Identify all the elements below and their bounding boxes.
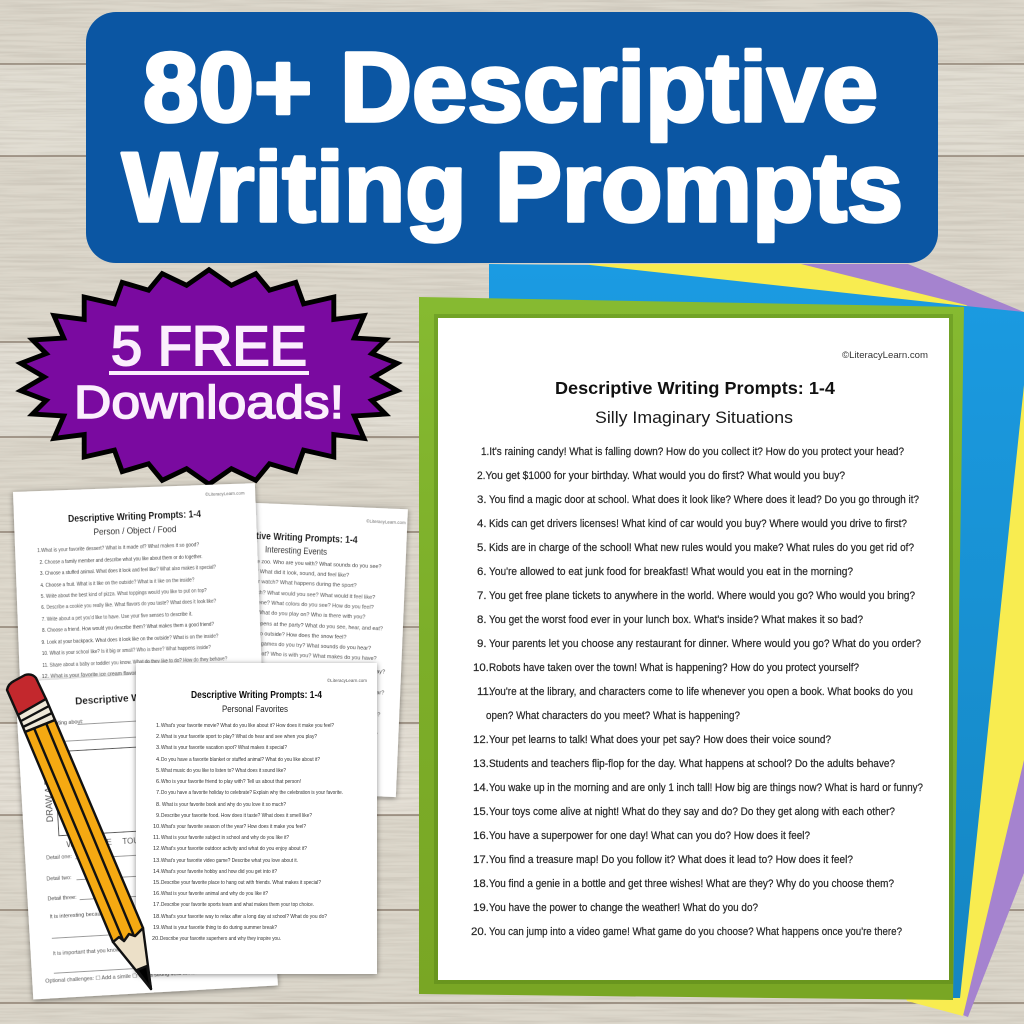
worksheet: graphic organizer: I am writing about: <box>39 719 84 728</box>
worksheet: person object food: Descriptive Writing Prompts: 1-4 <box>68 509 202 525</box>
prompt list: Students and teachers flip-flop for the day. What happens at school? Do the adults behave? <box>489 758 895 770</box>
worksheet: person object food: Person / Object / Food <box>93 524 177 538</box>
worksheet: personal favorites: What is your favorite animal and why do you like it? <box>161 891 268 897</box>
prompt list: You get the worst food ever in your lunch box. What's inside? What makes it so bad? <box>489 614 863 626</box>
worksheet: interesting events: do you do outside? How does the snow feel? <box>239 630 347 641</box>
Downloads: Downloads! <box>74 376 344 428</box>
worksheet: graphic organizer: Detail two: <box>46 875 72 883</box>
worksheet: personal favorites: 5. <box>156 768 161 774</box>
worksheet: personal favorites: 7. <box>156 790 161 796</box>
worksheet: interesting events: Descriptive Writing Prompts: 1-4 <box>224 530 358 546</box>
prompt list: Your toys come alive at night! What do they say and do? Do they get along with each other? <box>489 806 895 818</box>
title: Writing Prompts <box>122 132 903 242</box>
5 FREE: 5 FREE <box>111 314 307 377</box>
worksheet: interesting events: play or watch? What happens during the sport? <box>244 579 357 589</box>
worksheet: personal favorites: Descriptive Writing Prompts: 1-4 <box>191 690 322 701</box>
prompt list: You have the power to change the weather! What do you do? <box>489 902 758 914</box>
worksheet: graphic organizer: DRAW A PICTURE <box>41 745 55 822</box>
worksheet: interesting events: do you eat? Who is with you? What makes do you have? <box>241 650 377 662</box>
worksheet: personal favorites: 13. <box>153 858 161 864</box>
worksheet: interesting events: weather? What did it look, sound, and feel like? <box>235 568 349 579</box>
worksheet: personal favorites: What is your favorite subject in school and why do you like it? <box>161 835 289 841</box>
worksheet: personal favorites: Describe your favorite superhero and why they inspire you. <box>160 936 281 942</box>
prompt list: open? What characters do you meet? What is happening? <box>486 710 740 722</box>
prompt list <box>471 446 923 938</box>
worksheet: interesting events: What happens at the party? What do you see, hear, and eat? <box>237 620 383 632</box>
prompt list: 14. <box>473 782 489 794</box>
worksheet heading: Descriptive Writing Prompts: 1-4 <box>555 378 835 398</box>
worksheet: person object food: 8. Choose a friend. How would you describe them? What makes them a good friend? <box>42 622 214 634</box>
prompt list: 15. <box>473 806 489 818</box>
worksheet: personal favorites: 19. <box>153 925 161 931</box>
worksheet: personal favorites: 10. <box>153 824 161 830</box>
worksheet: interesting events: rides or games do you try? What sounds do you hear? <box>241 640 371 652</box>
worksheet: person object food: 9. Look at your backpack. What does it look like on the outside? What is on the inside? <box>41 634 219 646</box>
worksheet: personal favorites: Describe your favorite sports team and what makes them your top choice. <box>161 902 314 908</box>
blue paper <box>489 264 1024 998</box>
prompt list: 7. <box>477 590 486 602</box>
prompt list: 3. <box>477 494 486 506</box>
prompt list: You have a superpower for one day! What can you do? How does it feel? <box>489 830 810 842</box>
prompt list: 18. <box>473 878 489 890</box>
prompt list: 20. <box>471 926 487 938</box>
prompt list: 6. <box>477 566 486 578</box>
worksheet: personal favorites: 11. <box>153 835 161 841</box>
green paper <box>419 297 964 1000</box>
worksheet subheading: Silly Imaginary Situations <box>595 409 793 427</box>
prompt list: 10. <box>473 662 489 674</box>
worksheet: personal favorites: What music do you like to listen to? What does it sound like? <box>161 768 286 774</box>
prompt list: Your parents let you choose any restaurant for dinner. Where would you go? What do you order? <box>489 638 921 650</box>
worksheet: graphic organizer: Descriptive Writing Prompts <box>75 689 209 708</box>
worksheet: person object food: 10. What is your school like? Is it big or small? Who is there? What happens inside? <box>42 645 211 657</box>
prompt list: You wake up in the morning and are only 1 inch tall! How big are things now? What is hard or funny? <box>489 782 923 794</box>
prompt list: 1.It's raining candy! What is falling down? How do you collect it? How do you protect your head? <box>481 446 904 458</box>
prompt list: You find a genie in a bottle and get three wishes! What are they? Why do you choose them? <box>489 878 894 890</box>
worksheet: personal favorites: 18. <box>153 914 161 920</box>
prompt list: Kids can get drivers licenses! What kind of car would you buy? Where would you drive to first? <box>489 518 907 530</box>
worksheet: person object food: 4. Choose a fruit. What is it like on the outside? What is it like on the inside? <box>40 577 194 589</box>
copyright: ©LiteracyLearn.com <box>842 350 928 361</box>
worksheet: personal favorites: What's your favorite outdoor activity and what do you enjoy about it? <box>161 846 307 852</box>
worksheet: graphic organizer: TOUCH <box>122 835 151 846</box>
worksheet: personal favorites: Do you have a favorite blanket or stuffed animal? What do you like about it? <box>161 757 320 763</box>
worksheet: person object food: 11. Share about a baby or toddler you know. What do they like to do? How do they behave? <box>42 656 227 669</box>
prompt list: Your pet learns to talk! What does your pet say? How does their voice sound? <box>489 734 831 746</box>
worksheet: personal favorites: What is your favorite thing to do during summer break? <box>161 925 277 931</box>
worksheet: person object food: 5. Write about the best kind of pizza. What toppings would you like to put on top? <box>41 588 207 600</box>
worksheet: personal favorites: Describe your favorite food. How does it taste? What does it smell like? <box>161 813 312 819</box>
title <box>122 32 903 242</box>
prompt list: 11. <box>477 686 492 698</box>
worksheet: graphic organizer: WHAT I SEE <box>66 838 112 849</box>
prompt list: Robots have taken over the town! What is happening? How do you protect yourself? <box>489 662 859 674</box>
prompt list: You find a treasure map! Do you follow it? What does it lead to? How does it feel? <box>489 854 853 866</box>
worksheet: personal favorites: What's your favorite movie? What do you like about it? How does it make you feel? <box>161 723 334 729</box>
worksheet: graphic organizer: Detail one: <box>46 854 72 861</box>
worksheet: person object food: 1.What is your favorite dessert? What is it made of? What makes it so good? <box>37 542 199 554</box>
worksheet: personal favorites: What's your favorite hobby and how did you get into it? <box>161 869 277 875</box>
worksheet: interesting events: playground. What do you play on? Who is there with you? <box>227 609 365 621</box>
worksheet: personal favorites: 8. <box>156 802 161 808</box>
worksheet: personal favorites: What is your favorite book and why do you love it so much? <box>162 802 286 808</box>
worksheet: personal favorites: What's your favorite video game? Describe what you love about it. <box>161 858 298 864</box>
prompt list: 8. <box>477 614 486 626</box>
prompt list: Kids are in charge of the school! What new rules would you make? What rules do you get rid of? <box>489 542 914 554</box>
worksheet: person object food <box>13 483 262 692</box>
worksheet: personal favorites: 17. <box>153 902 161 908</box>
worksheet: personal favorites: 9. <box>156 813 161 819</box>
prompt list: 17. <box>473 854 489 866</box>
worksheet: personal favorites: Personal Favorites <box>222 704 288 715</box>
prompt list: You get free plane tickets to anywhere in the world. Where would you go? Who would you bring? <box>489 590 915 602</box>
worksheet: person object food: 6. Describe a cookie you really like. What flavors do you taste? What does it look like? <box>41 599 216 611</box>
worksheet: interesting events: is it fun? <box>360 712 380 718</box>
prompt list: 9. <box>477 638 486 650</box>
prompt list: 16. <box>473 830 489 842</box>
worksheet: interesting events: ©LiteracyLearn.com <box>366 519 406 525</box>
title: 80+ Descriptive <box>143 32 878 142</box>
prompt list: 13. <box>473 758 489 770</box>
worksheet: graphic organizer: Optional challenges: ☐ Add a simile ☐ Use a strong verb ☐ Add a sound <box>45 969 219 985</box>
yellow paper <box>589 264 1024 1016</box>
prompt list: 4. <box>477 518 486 530</box>
prompt list: You can jump into a video game! What game do you choose? What happens once you're there? <box>489 926 902 938</box>
worksheet: personal favorites: Describe your favorite place to hang out with friends. What makes it special? <box>161 880 321 886</box>
prompt list: You find a magic door at school. What does it look like? Where does it lead? Do you go through it? <box>489 494 919 506</box>
worksheet: personal favorites: 2. <box>156 734 161 740</box>
worksheet: person object food: 3. Choose a stuffed animal. What does it look and feel like? What also makes it special? <box>40 565 216 577</box>
worksheet: personal favorites: What is your favorite sport to play? What do hear and see when you play? <box>161 734 317 740</box>
worksheet: graphic organizer <box>15 668 278 999</box>
worksheet: personal favorites: 4. <box>156 757 161 763</box>
worksheet: personal favorites: 3. <box>156 745 161 751</box>
worksheet: personal favorites: 1. <box>156 723 161 729</box>
icon: pencil <box>7 674 151 989</box>
worksheet: personal favorites: 12. <box>153 846 161 852</box>
worksheet: interesting events: what do you hear? <box>339 689 384 696</box>
worksheet: interesting events: you? <box>366 732 378 738</box>
worksheet: person object food: 12. What is your favorite ice cream flavor? Describe how it looks and tastes. <box>42 668 217 680</box>
worksheet: personal favorites: What's your favorite season of the year? How does it make you feel? <box>161 824 306 830</box>
title banner <box>86 12 938 263</box>
worksheet: graphic organizer: It is interesting because: <box>49 911 108 920</box>
worksheet: personal favorites: What's your favorite way to relax after a long day at school? What do you do? <box>161 914 327 920</box>
worksheet: interesting events: creative scene? What colors do you see? How do you feel? <box>232 599 374 611</box>
worksheet: personal favorites: 16. <box>153 891 161 897</box>
purple paper <box>801 264 1024 1017</box>
worksheet: interesting events: person at the zoo. Who are you with? What sounds do you see? <box>228 558 382 570</box>
worksheet: personal favorites: Do you have a favorite holiday to celebrate? Explain why the celebration is your favorite. <box>161 790 343 796</box>
worksheet: personal favorites: 6. <box>156 779 161 785</box>
worksheet: personal favorites: ©LiteracyLearn.com <box>327 678 367 683</box>
worksheet: personal favorites <box>136 663 377 974</box>
worksheet: personal favorites: 14. <box>153 869 161 875</box>
prompt list: 2.You get $1000 for your birthday. What would you do first? What would you buy? <box>477 470 845 482</box>
worksheet: graphic organizer: It is important that you know: <box>53 947 121 957</box>
prompt list: You're allowed to eat junk food for breakfast! What would you eat in the morning? <box>489 566 853 578</box>
prompt list: 19. <box>473 902 489 914</box>
worksheet: personal favorites: What is your favorite vacation spot? What makes it special? <box>161 745 287 751</box>
prompt list: You're at the library, and characters come to life whenever you open a book. What books do you <box>489 686 913 698</box>
worksheet: interesting events: of the beach? What would you see? What would it feel like? <box>233 589 375 601</box>
worksheet: personal favorites: 20. <box>152 936 160 942</box>
worksheet: person object food: 2. Choose a family member and describe what you like about them or do together. <box>40 554 203 566</box>
starburst badge <box>21 270 397 484</box>
prompt list: 5. <box>477 542 486 554</box>
worksheet: person object food: ©LiteracyLearn.com <box>205 491 245 497</box>
prompt list: 12. <box>473 734 489 746</box>
worksheet: graphic organizer: Detail three: <box>47 895 77 902</box>
worksheet: interesting events: are you going? What do you see along the way? <box>270 665 385 676</box>
main worksheet <box>438 318 949 980</box>
worksheet: interesting events <box>214 502 408 797</box>
worksheet: personal favorites: 15. <box>153 880 161 886</box>
worksheet: person object food: 7. Write about a pet you'd like to have. Use your five senses to describe it. <box>42 612 193 623</box>
worksheet: interesting events: Interesting Events <box>265 544 327 558</box>
worksheet: personal favorites: Who is your favorite friend to play with? Tell us about that person! <box>161 779 301 785</box>
